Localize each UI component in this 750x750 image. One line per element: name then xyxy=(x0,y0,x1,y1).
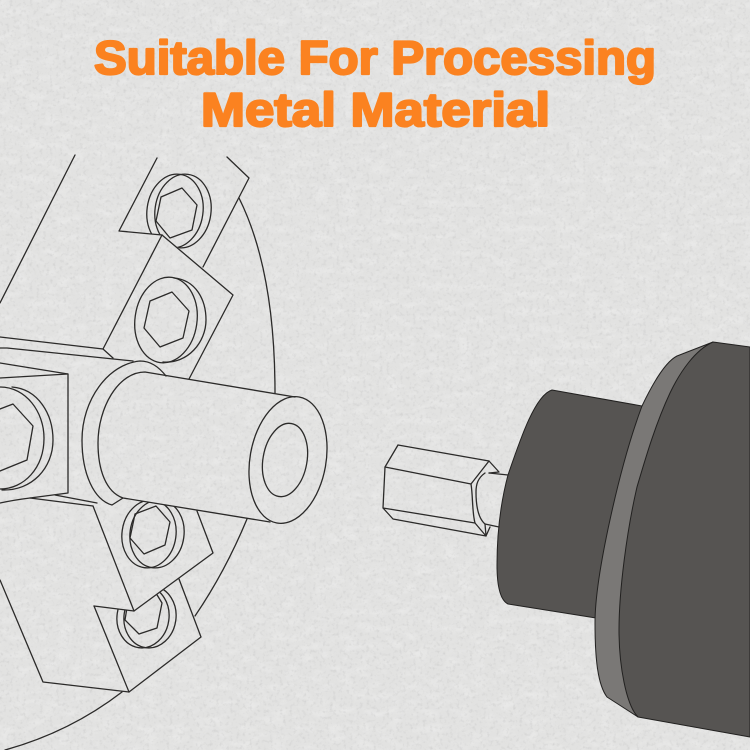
line drawing: lathe chuck with workpiece xyxy=(0,155,337,750)
power tool: drill body xyxy=(497,342,750,737)
title: Metal Material xyxy=(201,83,550,136)
tool main housing xyxy=(619,342,750,737)
title: Suitable For Processing xyxy=(94,31,656,84)
workpiece cylinder xyxy=(82,361,337,530)
chuck disc outline xyxy=(0,155,275,750)
tool nose cylinder xyxy=(497,390,642,618)
lower rear jaw with bolt xyxy=(94,579,201,692)
title xyxy=(94,31,656,136)
upper front jaw with bolt xyxy=(103,235,233,379)
tool collar ring xyxy=(595,342,713,717)
upper rear jaw with bolt xyxy=(119,157,249,267)
lower front jaw with bolt xyxy=(93,497,213,611)
left jaw with bolt xyxy=(0,337,133,506)
hex drill bit xyxy=(383,445,508,536)
